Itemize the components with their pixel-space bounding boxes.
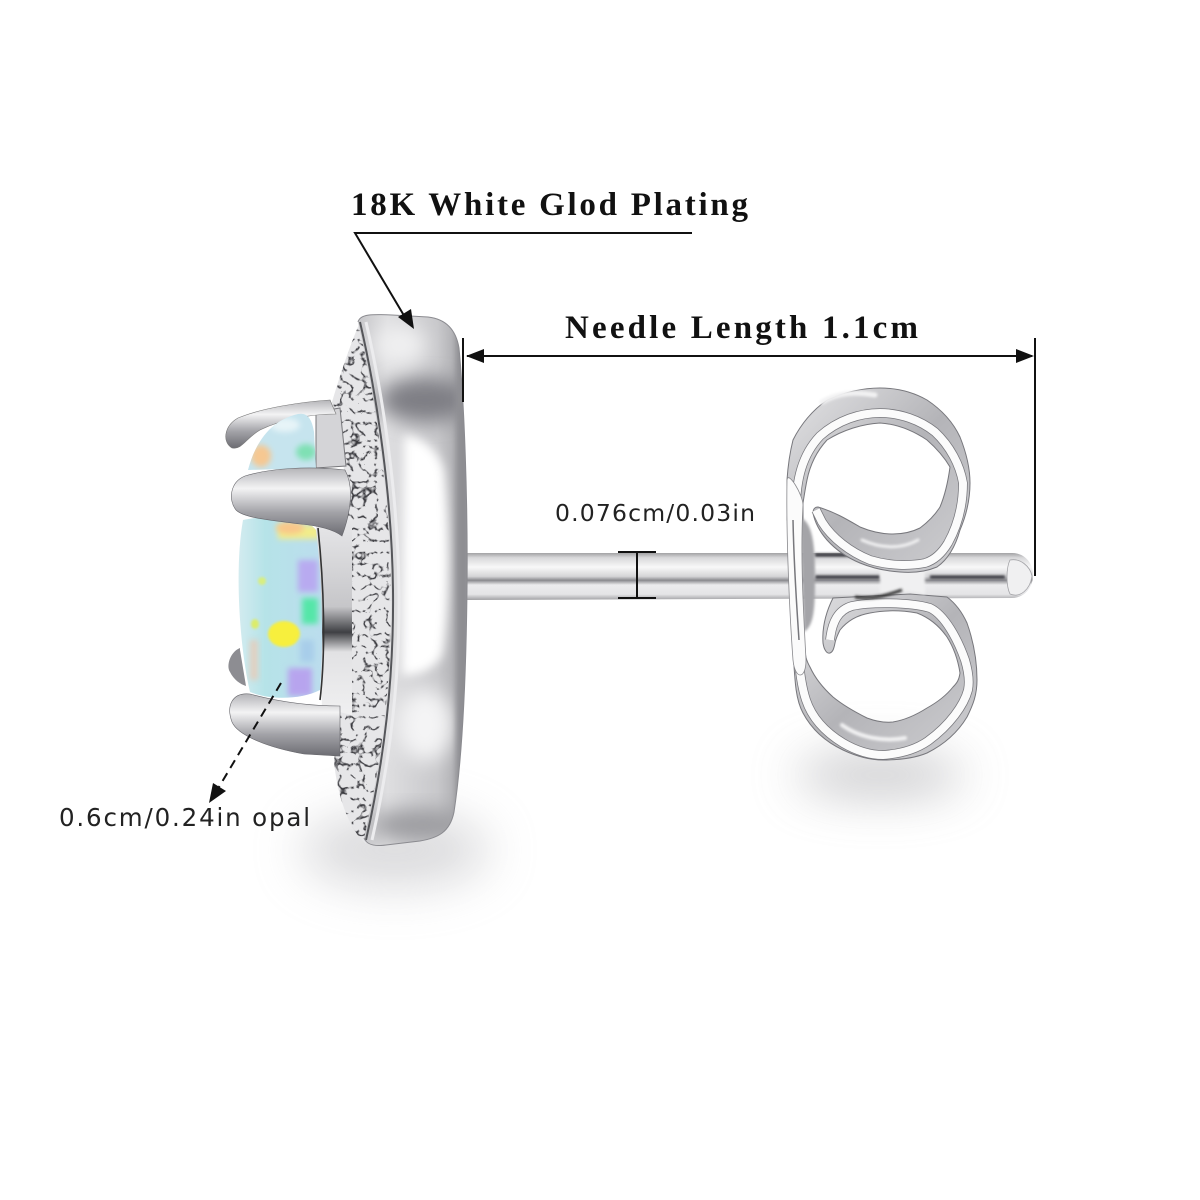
dimension: needle length: Needle Length 1.1cm	[565, 310, 918, 346]
dimension: opal size	[59, 683, 310, 832]
pave halo stones	[332, 322, 392, 844]
callout: 18K White Glod Plating	[351, 187, 748, 329]
gray shading in loops	[822, 393, 875, 402]
bottom loop	[793, 594, 977, 760]
rim line	[318, 528, 324, 700]
dimension: needle length	[463, 310, 1035, 576]
rear prong bottom	[228, 648, 246, 686]
post crimp	[880, 557, 925, 595]
top loop rim	[796, 413, 963, 565]
band	[358, 315, 467, 845]
opal lower	[238, 518, 322, 698]
dimension: post diameter	[555, 499, 755, 598]
top loop	[787, 388, 970, 572]
earring post	[466, 553, 1033, 600]
bottom loop rim	[798, 603, 969, 755]
rear prong top	[226, 400, 336, 448]
dimension: opal size: 0.6cm/0.24in opal	[59, 803, 310, 832]
spine	[787, 478, 806, 675]
stone seat	[316, 518, 352, 715]
opal upper	[248, 414, 316, 470]
butterfly back	[787, 388, 977, 760]
front prong upper	[231, 468, 350, 536]
callout: 18K White Glod Plating: 18K White Glod Plating	[351, 187, 748, 223]
spine shade	[800, 517, 815, 632]
front prong lower	[230, 694, 340, 756]
soft shadows	[300, 753, 965, 888]
earring head	[226, 310, 475, 850]
dimension: post diameter: 0.076cm/0.03in	[555, 499, 755, 527]
